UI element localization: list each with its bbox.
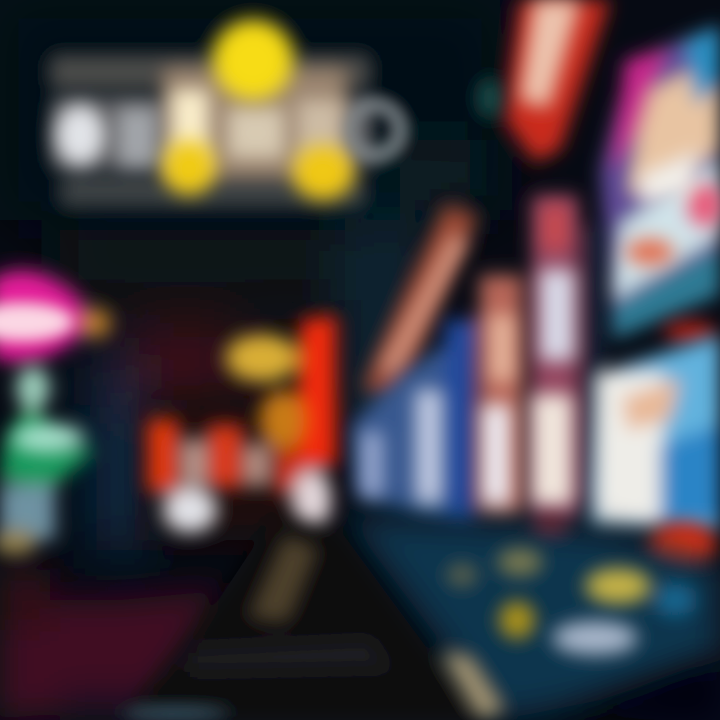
sign: ring emblem: [350, 105, 400, 155]
top striped red panel: [505, 0, 610, 162]
sign: illuminated marquee: [50, 20, 400, 207]
dark foreground hand: [120, 515, 505, 720]
red and yellow game machine: [148, 315, 336, 540]
machine columns: [352, 195, 603, 525]
colourful right-hand machines: [352, 0, 720, 567]
orange diagonal strip: [362, 205, 478, 395]
large colourful screen: [600, 25, 720, 340]
floor: maroon carpet: [0, 570, 225, 720]
background tones: [0, 0, 500, 550]
sign: white letters: [56, 90, 342, 170]
lower-right blue and white screen: [590, 335, 720, 530]
green machine figure: [0, 366, 95, 555]
machine console deck: [345, 515, 720, 720]
sign: yellow lights: [163, 20, 353, 199]
neon pink lips sign: [0, 270, 111, 362]
